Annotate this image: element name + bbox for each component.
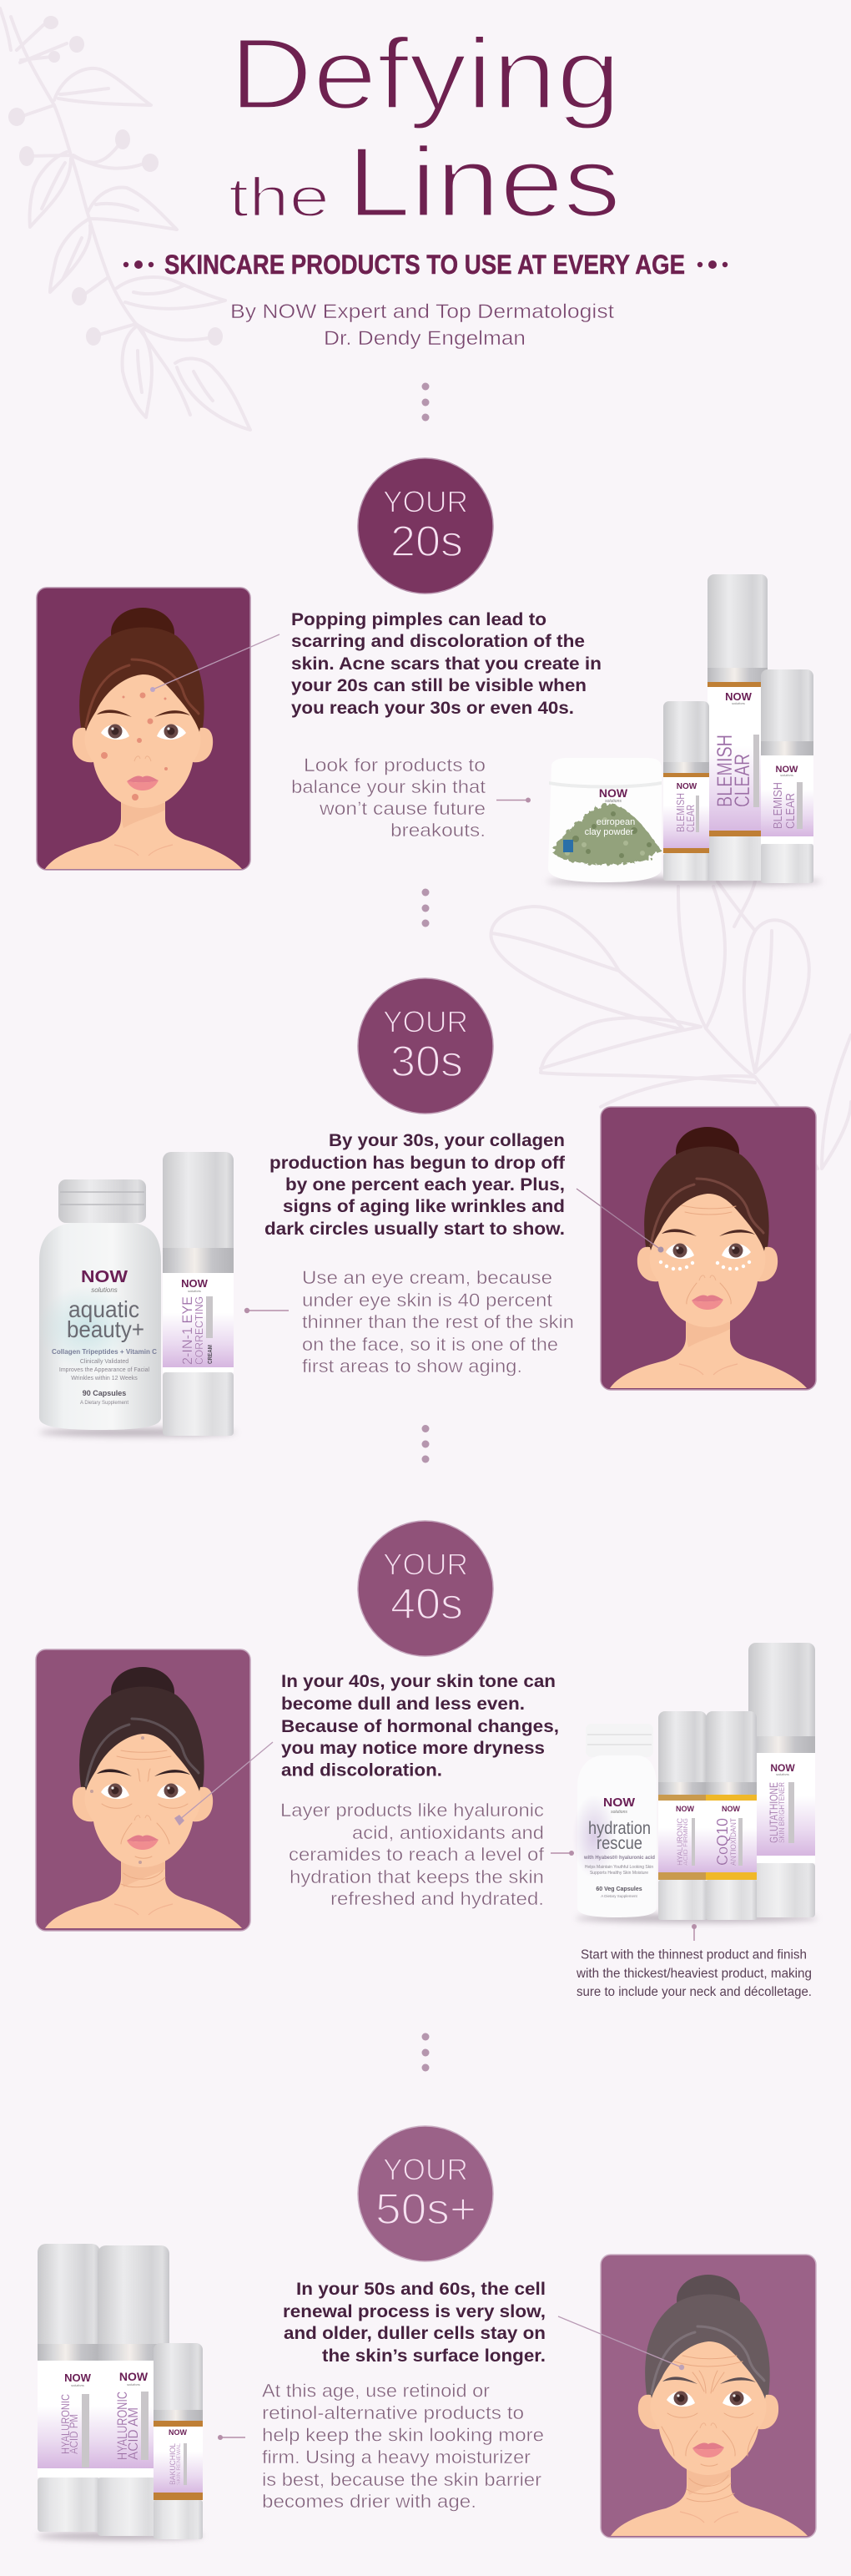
title: Lines xyxy=(347,127,621,238)
coq10 serum tube: CoQ10 xyxy=(714,1818,731,1866)
large blemish clear tube: NOW xyxy=(725,690,753,703)
text block: 40s advice: acid, antioxidants and xyxy=(352,1822,544,1843)
large blemish clear tube: CLEAR xyxy=(731,754,754,807)
hydration rescue bottle: NOW xyxy=(603,1796,636,1810)
glutathione cream tube xyxy=(748,1643,815,1917)
glutathione cream tube: NOW xyxy=(770,1762,795,1774)
arrow: 20s products xyxy=(496,798,531,803)
text block: 30s main: By your 30s, your collagen xyxy=(329,1131,565,1150)
arrow: 40s products xyxy=(551,1851,574,1856)
large blemish clear tube xyxy=(707,574,768,881)
text block: 20s main: Popping pimples can lead to xyxy=(291,610,546,629)
byline xyxy=(230,301,614,350)
aquatic beauty bottle: NOW xyxy=(81,1268,128,1286)
text block: 50s advice: firm. Using a heavy moisturizer xyxy=(262,2447,531,2467)
age badge: your 20s: YOUR xyxy=(383,484,468,519)
title: Defying xyxy=(229,17,621,130)
hyaluronic acid firming serum tube xyxy=(658,1711,707,1920)
hyaluronic acid pm tube: solutions xyxy=(71,2383,84,2387)
hyaluronic acid firming serum tube: NOW xyxy=(676,1805,694,1813)
clay powder jar: clay powder xyxy=(585,827,634,837)
text block: 30s main: production has begun to drop off xyxy=(269,1154,566,1173)
hydration rescue bottle: 60 Veg Capsules xyxy=(596,1887,642,1892)
clay powder jar: NOW xyxy=(599,786,628,800)
text block: layering tip: sure to include your neck and décolletage. xyxy=(577,1985,812,1999)
text block: 30s advice xyxy=(302,1267,574,1376)
hydration rescue bottle: hydration xyxy=(588,1819,651,1838)
aquatic beauty bottle: beauty+ xyxy=(67,1316,144,1342)
text block: 40s main xyxy=(281,1672,559,1780)
face illustration with acne xyxy=(45,608,242,869)
title xyxy=(229,17,621,238)
dotted divider 4 xyxy=(422,2033,429,2072)
text block: 30s advice: under eye skin is 40 percent xyxy=(302,1290,552,1311)
aquatic beauty bottle: Collagen Tripeptides + Vitamin C xyxy=(52,1348,157,1356)
small blemish clear tube: right: NOW xyxy=(776,765,798,775)
panel: face in your 50s xyxy=(601,2255,816,2538)
text block: 40s main: and discoloration. xyxy=(281,1761,442,1780)
small blemish clear tube: right xyxy=(761,669,813,883)
text block: 50s advice: becomes drier with age. xyxy=(262,2491,476,2512)
eye cream tube: solutions xyxy=(188,1289,201,1293)
panel: face in your 20s xyxy=(37,588,250,870)
hyaluronic acid am tube xyxy=(98,2245,169,2536)
face illustration with eye dots xyxy=(610,1127,807,1388)
hyaluronic acid pm tube: HYALURONIC xyxy=(58,2394,72,2454)
clay powder jar: solutions xyxy=(605,799,622,804)
text block: 30s advice: Use an eye cream, because xyxy=(302,1267,552,1288)
glutathione cream tube: GLUTATHIONE xyxy=(767,1782,780,1843)
bakuchiol serum tube: SKIN RENEWAL xyxy=(176,2443,182,2485)
hyaluronic acid am tube: ACID AM xyxy=(125,2407,141,2460)
text block: 50s main: the skin’s surface longer. xyxy=(322,2346,546,2366)
decorative branch: right side xyxy=(491,881,851,1169)
aquatic beauty bottle: A Dietary Supplement xyxy=(80,1401,128,1406)
text block: 50s advice: At this age, use retinoid or xyxy=(262,2381,490,2401)
text block: 50s advice: retinol-alternative products to xyxy=(262,2402,524,2423)
age badge: your 20s xyxy=(358,458,493,593)
callout line: 30s xyxy=(577,1189,664,1252)
text block: 20s advice xyxy=(291,755,486,841)
text block: 50s advice: is best, because the skin barrier xyxy=(262,2469,541,2490)
arrow: 30s products xyxy=(244,1308,289,1313)
eye cream tube: CORRECTING xyxy=(193,1296,205,1365)
dotted divider 3 xyxy=(422,1425,429,1462)
hyaluronic acid pm tube xyxy=(38,2244,100,2532)
hyaluronic acid pm tube: NOW xyxy=(64,2371,92,2384)
small blemish clear tube: right: solutions xyxy=(780,773,793,777)
text block: 40s main: Because of hormonal changes, xyxy=(281,1717,559,1736)
age badge: your 40s: YOUR xyxy=(383,1548,468,1581)
face illustration with early wrinkles xyxy=(45,1667,242,1928)
aquatic beauty bottle xyxy=(38,1179,161,1430)
text block: 30s main: signs of aging like wrinkles and xyxy=(283,1197,565,1216)
text block: 40s advice: ceramides to reach a level of xyxy=(289,1844,545,1865)
dotted divider 1 xyxy=(422,382,429,421)
hydration rescue bottle: A Dietary Supplement xyxy=(601,1894,638,1898)
aquatic beauty bottle: Wrinkles within 12 Weeks xyxy=(71,1376,138,1381)
hyaluronic acid firming serum tube: ACID FIRMING xyxy=(683,1818,689,1866)
text block: 20s main: you reach your 30s or even 40s. xyxy=(291,699,574,718)
small blemish clear tube: left: BLEMISH xyxy=(674,793,687,832)
text block: 40s main: you may notice more dryness xyxy=(281,1739,545,1758)
age badge: your 30s xyxy=(358,978,493,1114)
text block: 20s main: your 20s can still be visible when xyxy=(291,676,587,695)
panel: face in your 30s xyxy=(601,1107,816,1390)
text block: 30s advice: on the face, so it is one of the xyxy=(302,1334,558,1355)
clay powder jar xyxy=(548,758,662,882)
aquatic beauty bottle: aquatic xyxy=(68,1296,139,1322)
text block: 50s main: and older, duller cells stay on xyxy=(284,2324,546,2343)
hyaluronic acid pm tube: ACID PM xyxy=(67,2414,80,2454)
aquatic beauty bottle: 90 Capsules xyxy=(83,1389,126,1397)
coq10 serum tube: ANTIOXIDANT xyxy=(729,1818,738,1866)
large blemish clear tube: solutions xyxy=(732,701,745,705)
decorative branch: top left xyxy=(0,8,250,430)
text block: 50s main xyxy=(283,2280,546,2366)
hyaluronic acid am tube: solutions xyxy=(127,2382,140,2387)
aquatic beauty bottle: solutions xyxy=(91,1286,118,1294)
age badge: your 50s+: YOUR xyxy=(383,2152,468,2187)
text block: 40s advice xyxy=(280,1800,545,1909)
callout line: 20s xyxy=(150,634,279,692)
products: 50s hyaluronic acid and bakuchiol xyxy=(37,2244,204,2540)
callout line: 50s xyxy=(558,2316,684,2370)
hydration rescue bottle: with Hyabest® hyaluronic acid xyxy=(583,1855,655,1861)
small blemish clear tube: left: NOW xyxy=(677,782,697,791)
text block: 50s advice: help keep the skin looking more xyxy=(262,2424,544,2446)
text block: 30s main xyxy=(264,1131,566,1239)
glutathione cream tube: solutions xyxy=(776,1772,789,1776)
hydration rescue bottle: Supports Healthy Skin Moisture xyxy=(590,1871,648,1876)
hydration rescue bottle: rescue xyxy=(597,1834,642,1853)
large blemish clear tube: BLEMISH xyxy=(713,735,737,807)
text block: 20s main: skin. Acne scars that you create in xyxy=(291,654,602,674)
arrow: 50s products xyxy=(218,2435,245,2440)
small blemish clear tube: left: CLEAR xyxy=(684,805,697,832)
text block: 40s main: In your 40s, your skin tone can xyxy=(281,1672,556,1691)
bakuchiol serum tube: NOW xyxy=(169,2428,187,2437)
text block: 20s advice: balance your skin that xyxy=(291,776,486,797)
aquatic beauty bottle: Improves the Appearance of Facial xyxy=(59,1367,150,1373)
small blemish clear tube: left xyxy=(663,701,709,881)
hydration rescue bottle xyxy=(572,1724,657,1917)
age badge: your 40s xyxy=(358,1521,493,1656)
text block: 40s advice: Layer products like hyaluronic xyxy=(280,1800,544,1821)
age badge: your 30s: YOUR xyxy=(383,1005,468,1038)
text block: 20s advice: won’t cause future xyxy=(319,798,486,819)
text block: 20s advice: Look for products to xyxy=(304,755,486,775)
eye cream tube: NOW xyxy=(181,1277,209,1290)
arrow: layering tip xyxy=(692,1924,697,1941)
coq10 serum tube: NOW xyxy=(722,1805,741,1813)
subtitle: SKINCARE PRODUCTS TO USE AT EVERY AGE xyxy=(164,250,685,280)
text block: 50s advice xyxy=(262,2381,544,2512)
text block: 20s main: scarring and discoloration of the xyxy=(291,632,585,651)
age badge: your 20s: 20s xyxy=(390,518,463,566)
glutathione cream tube: SKIN BRIGHTENER xyxy=(778,1782,786,1843)
eye cream tube: CREAM xyxy=(208,1345,214,1364)
text block: 20s main xyxy=(291,610,602,718)
age badge: your 50s+: 50s+ xyxy=(375,2185,476,2234)
text block: layering tip xyxy=(576,1948,812,1999)
text block: layering tip: with the thickest/heaviest product, making xyxy=(576,1967,812,1981)
small blemish clear tube: right: BLEMISH xyxy=(771,782,785,829)
bakuchiol serum tube xyxy=(154,2343,203,2539)
byline: Dr. Dendy Engelman xyxy=(324,327,526,350)
hydration rescue bottle: Helps Maintain Youthful Looking Skin xyxy=(585,1865,653,1870)
text block: 30s main: by one percent each year. Plus, xyxy=(285,1175,565,1195)
eye cream tube xyxy=(163,1152,234,1436)
callout line: 40s xyxy=(174,1742,273,1826)
coq10 serum tube xyxy=(706,1711,757,1920)
hyaluronic acid am tube: HYALURONIC xyxy=(114,2392,130,2460)
text block: 30s main: dark circles usually start to show. xyxy=(264,1220,565,1239)
text block: 50s main: In your 50s and 60s, the cell xyxy=(296,2280,546,2299)
age badge: your 30s: 30s xyxy=(390,1038,463,1086)
eye cream tube: 2-IN-1 EYE xyxy=(179,1296,195,1365)
panel: face in your 40s xyxy=(36,1649,250,1931)
small blemish clear tube: right: CLEAR xyxy=(783,793,798,829)
text block: layering tip: Start with the thinnest product and finish xyxy=(581,1948,807,1962)
products: 40s serums and creams xyxy=(572,1643,818,1922)
hyaluronic acid am tube: NOW xyxy=(119,2370,149,2383)
text block: 40s advice: hydration that keeps the skin xyxy=(290,1866,544,1887)
hydration rescue bottle: solutions xyxy=(611,1810,627,1815)
products: 30s aquatic beauty and eye cream xyxy=(38,1152,236,1437)
products: 20s blemish clear range xyxy=(546,574,822,886)
text block: 30s advice: first areas to show aging. xyxy=(302,1356,522,1376)
text block: 40s advice: refreshed and hydrated. xyxy=(330,1888,544,1909)
aquatic beauty bottle: Clinically Validated xyxy=(80,1359,128,1365)
title: the xyxy=(229,166,330,228)
text block: 50s main: renewal process is very slow, xyxy=(283,2302,546,2321)
byline: By NOW Expert and Top Dermatologist xyxy=(230,301,614,323)
text block: 30s advice: thinner than the rest of the skin xyxy=(302,1311,574,1332)
age badge: your 50s+ xyxy=(358,2126,493,2261)
hyaluronic acid firming serum tube: HYALURONIC xyxy=(676,1818,685,1866)
age badge: your 40s: 40s xyxy=(390,1580,463,1629)
face illustration with deep wrinkles xyxy=(611,2275,808,2536)
bakuchiol serum tube: BAKUCHIOL xyxy=(169,2443,177,2485)
text block: 20s advice: breakouts. xyxy=(390,820,486,841)
dotted divider 2 xyxy=(422,888,429,927)
text block: 40s main: become dull and less even. xyxy=(281,1695,525,1714)
clay powder jar: european xyxy=(597,817,635,827)
